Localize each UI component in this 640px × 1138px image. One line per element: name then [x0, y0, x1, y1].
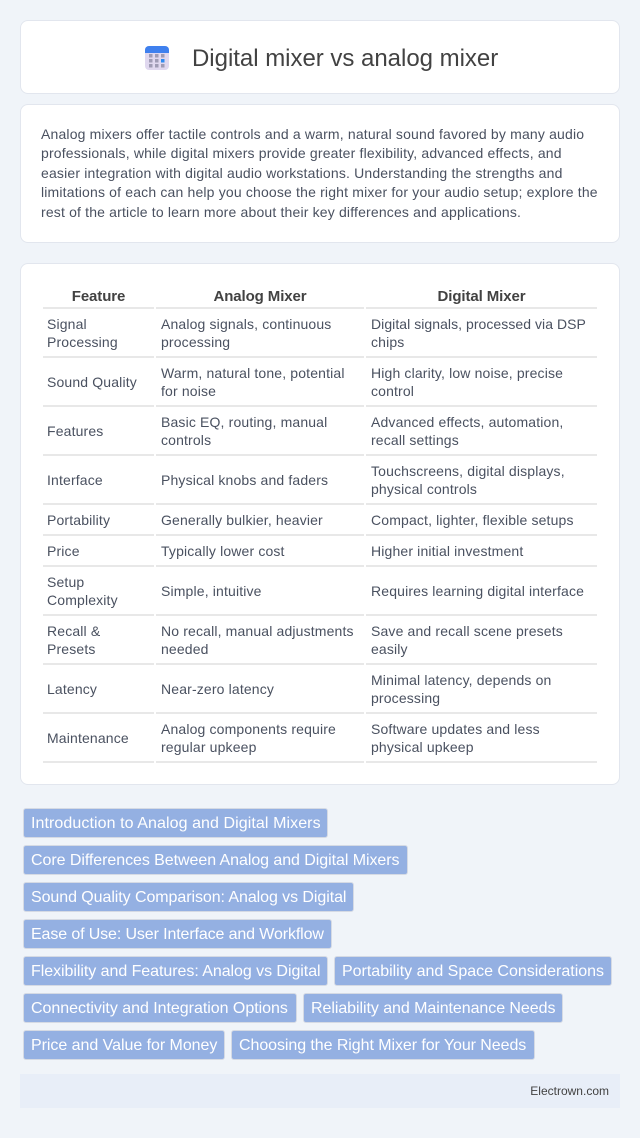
- title: Digital mixer vs analog mixer: [192, 45, 498, 72]
- tag: choosing: [231, 1030, 535, 1060]
- comparison table: Digital signals, processed via DSP: [371, 316, 586, 332]
- footer: [20, 1074, 620, 1108]
- comparison table: Touchscreens, digital displays,: [371, 463, 565, 479]
- tag: connectivity: Connectivity and Integration Options: [31, 1000, 288, 1017]
- comparison table: physical controls: [371, 481, 477, 497]
- tag: sound quality: Sound Quality Comparison: Analog vs Digital: [31, 889, 346, 906]
- tag: price: [23, 1030, 225, 1060]
- topic links: [23, 808, 612, 1060]
- row: price: [47, 543, 524, 559]
- comparison table: Analog signals, continuous: [161, 316, 331, 332]
- tag: price: Price and Value for Money: [31, 1037, 217, 1054]
- tag: choosing: Choosing the Right Mixer for Your Needs: [239, 1037, 526, 1054]
- comparison table: Compact, lighter, flexible setups: [371, 512, 574, 528]
- comparison table: Advanced effects, automation,: [371, 414, 563, 430]
- comparison table: processing: [161, 334, 230, 350]
- comparison table: for noise: [161, 383, 216, 399]
- tag: ease of use: [23, 919, 332, 949]
- comparison table: No recall, manual adjustments: [161, 623, 354, 639]
- table header: [72, 288, 526, 305]
- comparison table: Typically lower cost: [161, 543, 285, 559]
- tag: ease of use: Ease of Use: User Interface and Workflow: [31, 926, 324, 943]
- row: latency: [47, 672, 551, 706]
- comparison table: Warm, natural tone, potential: [161, 365, 345, 381]
- intro text: rest of the article to learn more about their key differences and applications.: [41, 204, 521, 220]
- comparison table: Recall &: [47, 623, 100, 639]
- comparison table: Complexity: [47, 592, 118, 608]
- comparison table: Physical knobs and faders: [161, 472, 328, 488]
- comparison table: Analog components require: [161, 721, 336, 737]
- icon: mixer grid: [145, 46, 169, 70]
- comparison table: processing: [371, 690, 440, 706]
- panel: introduction: [20, 104, 620, 243]
- tag: portability: [334, 956, 612, 986]
- comparison table: recall settings: [371, 432, 459, 448]
- comparison table: Higher initial investment: [371, 543, 523, 559]
- row: signal processing: [47, 316, 586, 350]
- row: features: [47, 414, 563, 448]
- comparison table: Sound Quality: [47, 374, 137, 390]
- footer credit: Electrown.com: [530, 1084, 609, 1098]
- intro text: easier integration with digital audio workstations. Understanding the strengths and: [41, 165, 563, 181]
- comparison table: Software updates and less: [371, 721, 540, 737]
- tag: reliability: Reliability and Maintenance Needs: [311, 1000, 555, 1017]
- row: interface: [47, 463, 565, 497]
- tag: portability: Portability and Space Considerations: [342, 963, 604, 980]
- comparison table: Presets: [47, 641, 96, 657]
- panel: comparison table: [20, 263, 620, 785]
- comparison table: Interface: [47, 472, 103, 488]
- comparison table: Generally bulkier, heavier: [161, 512, 323, 528]
- comparison table: needed: [161, 641, 209, 657]
- comparison table: Latency: [47, 681, 97, 697]
- intro text: professionals, while digital mixers provide greater flexibility, advanced effects, and: [41, 145, 562, 161]
- tag: core differences: [23, 845, 408, 875]
- row: recall and presets: [47, 623, 563, 657]
- comparison table: physical upkeep: [371, 739, 474, 755]
- comparison table: Minimal latency, depends on: [371, 672, 551, 688]
- comparison table: High clarity, low noise, precise: [371, 365, 563, 381]
- tag: introduction: [23, 808, 328, 838]
- comparison table: control: [371, 383, 414, 399]
- comparison table: easily: [371, 641, 408, 657]
- comparison table: Signal: [47, 316, 87, 332]
- tag: reliability: [303, 993, 563, 1023]
- comparison table: [43, 288, 597, 763]
- comparison table: regular upkeep: [161, 739, 256, 755]
- comparison table: controls: [161, 432, 211, 448]
- comparison table: Processing: [47, 334, 118, 350]
- comparison table: Basic EQ, routing, manual: [161, 414, 327, 430]
- comparison table: Feature: [72, 288, 125, 305]
- comparison table: Features: [47, 423, 103, 439]
- tag: sound quality: [23, 882, 354, 912]
- row: sound quality: [47, 365, 563, 399]
- comparison table: Simple, intuitive: [161, 583, 262, 599]
- row: setup complexity: [47, 574, 584, 608]
- comparison table: Portability: [47, 512, 110, 528]
- comparison table: Near-zero latency: [161, 681, 274, 697]
- comparison table: Digital Mixer: [438, 288, 525, 305]
- tag: flexibility: Flexibility and Features: Analog vs Digital: [31, 963, 321, 980]
- comparison table: Price: [47, 543, 80, 559]
- comparison table: Setup: [47, 574, 84, 590]
- intro text: [41, 126, 598, 220]
- tag: core differences: Core Differences Between Analog and Digital Mixers: [31, 852, 399, 869]
- comparison table: chips: [371, 334, 404, 350]
- comparison table: Maintenance: [47, 730, 129, 746]
- row: maintenance: [47, 721, 540, 755]
- row: portability: [47, 512, 574, 528]
- intro text: Analog mixers offer tactile controls and a warm, natural sound favored by many audio: [41, 126, 584, 142]
- comparison table: Analog Mixer: [214, 288, 306, 305]
- tag: flexibility: [23, 956, 328, 986]
- tag: connectivity: [23, 993, 297, 1023]
- header panel: [20, 20, 620, 94]
- comparison table: Requires learning digital interface: [371, 583, 584, 599]
- tag: introduction: Introduction to Analog and Digital Mixers: [31, 815, 321, 832]
- comparison table: Save and recall scene presets: [371, 623, 563, 639]
- intro text: limitations of each can help you choose the right mixer for your audio setup; explore the: [41, 184, 598, 200]
